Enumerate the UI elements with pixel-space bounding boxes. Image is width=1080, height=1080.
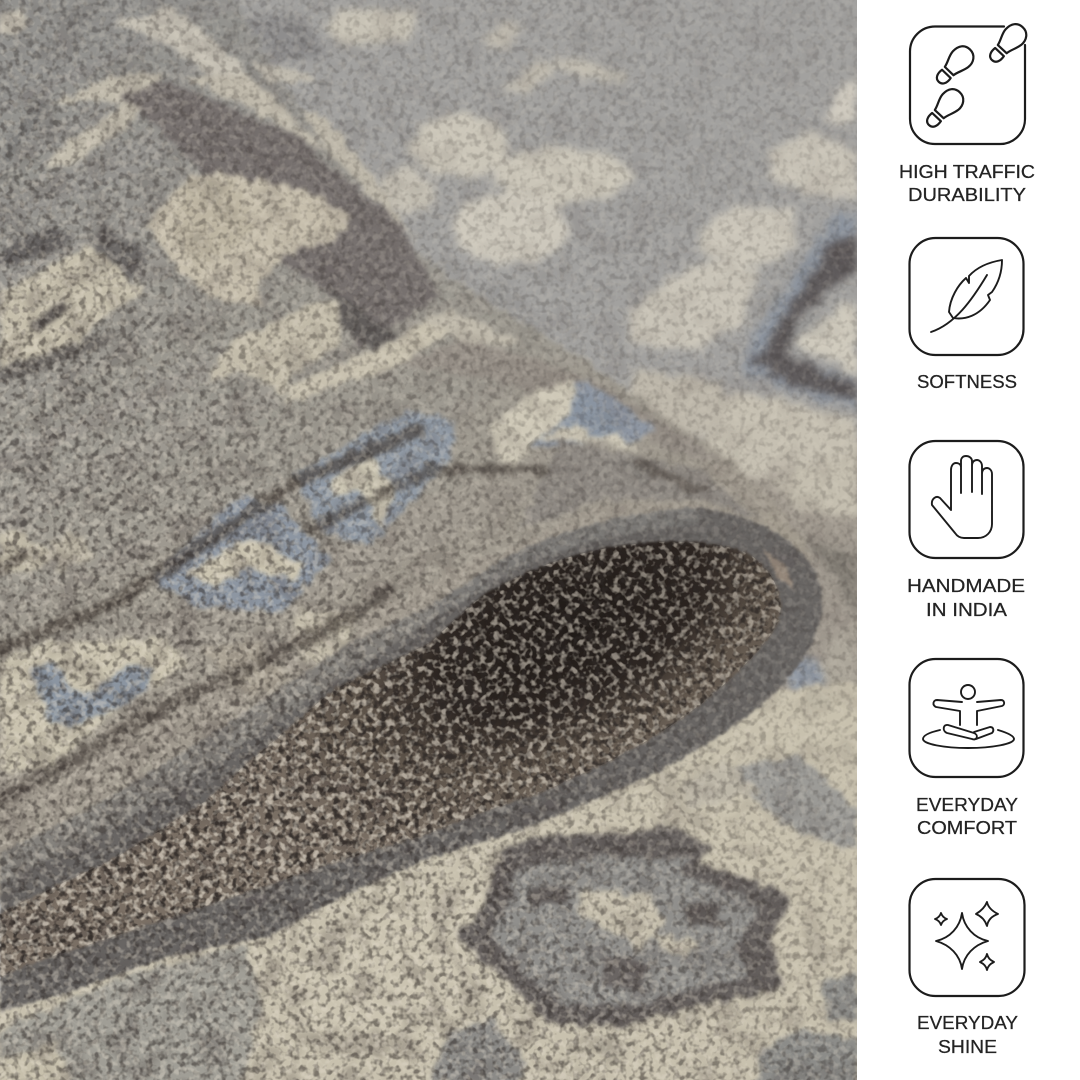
label: everyday comfort: COMFORT	[917, 817, 1017, 838]
icon: everyday comfort meditation figure	[910, 659, 1024, 777]
icon: everyday shine sparkles	[910, 879, 1024, 996]
large scale mottling	[0, 0, 857, 1080]
icon: high traffic footprints	[910, 20, 1031, 144]
label: everyday shine	[917, 1012, 1018, 1057]
wool texture overlay	[0, 0, 857, 1080]
icon: handmade hand	[910, 441, 1024, 558]
label: everyday shine: EVERYDAY	[917, 1012, 1018, 1033]
icon: softness feather	[910, 238, 1024, 355]
cream patch	[145, 175, 350, 305]
rug underside inside the fold	[0, 542, 781, 977]
label: softness: SOFTNESS	[917, 371, 1017, 392]
label: handmade in india: HANDMADE	[907, 575, 1025, 596]
rug edge binding around the fold	[0, 508, 822, 1012]
label: everyday comfort	[916, 794, 1018, 838]
label: handmade in india	[907, 575, 1025, 620]
label: everyday comfort: EVERYDAY	[916, 794, 1018, 815]
border motifs	[398, 341, 708, 459]
flap dark lines	[0, 430, 700, 800]
label: high traffic durability: DURABILITY	[908, 184, 1026, 205]
rug flap: top side of the fold	[0, 0, 812, 900]
label: high traffic durability: HIGH TRAFFIC	[899, 161, 1035, 182]
label: everyday shine: SHINE	[938, 1036, 997, 1057]
rug background: upper right field	[232, 0, 857, 702]
label: handmade in india: IN INDIA	[926, 599, 1008, 620]
brown band	[118, 82, 440, 350]
rug lower field with grey motif	[0, 680, 880, 1080]
label: high traffic durability	[899, 161, 1035, 205]
underside high contrast weave	[0, 520, 800, 990]
grey motif	[458, 823, 793, 1027]
